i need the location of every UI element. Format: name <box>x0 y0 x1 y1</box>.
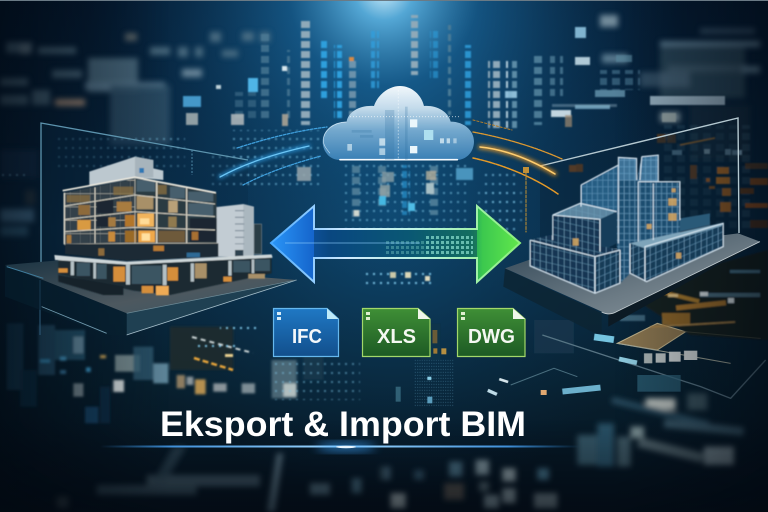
file icon: XLS <box>362 308 430 356</box>
background: tile columns, centre and upper right <box>183 15 725 128</box>
file icon: DWG: DWG <box>468 326 515 348</box>
background: lower-left bokeh <box>57 393 744 512</box>
background: lower-left building lights <box>192 322 360 400</box>
title: Eksport & Import BIM <box>160 405 526 444</box>
background: floor glow under right building <box>620 250 768 340</box>
file icon: IFC: IFC <box>292 326 322 348</box>
right platform <box>503 233 760 333</box>
file icon: XLS: XLS <box>377 326 416 348</box>
left platform <box>5 261 297 335</box>
right building on platform <box>503 155 760 333</box>
cloud icon <box>323 86 474 160</box>
right building <box>530 155 723 293</box>
left holographic panel frame <box>40 123 248 335</box>
file icon: IFC <box>274 308 338 356</box>
background: orange windows, right edge <box>569 125 768 230</box>
background: blurred data tiles, upper area <box>0 15 760 303</box>
background: small lights, mid columns behind arrow <box>0 130 525 284</box>
background: lower-left reflections <box>7 323 323 423</box>
file icon: DWG <box>458 308 525 356</box>
right holographic panel frame <box>540 118 739 265</box>
left building <box>54 157 273 295</box>
bidirectional arrow <box>271 206 520 282</box>
background: lower-right circuit floor <box>396 320 766 407</box>
data arcs: blue, left of cloud <box>220 127 327 185</box>
title underline with glow <box>100 443 580 451</box>
data arcs: orange, right of cloud <box>473 120 562 232</box>
left building on platform <box>5 157 297 335</box>
